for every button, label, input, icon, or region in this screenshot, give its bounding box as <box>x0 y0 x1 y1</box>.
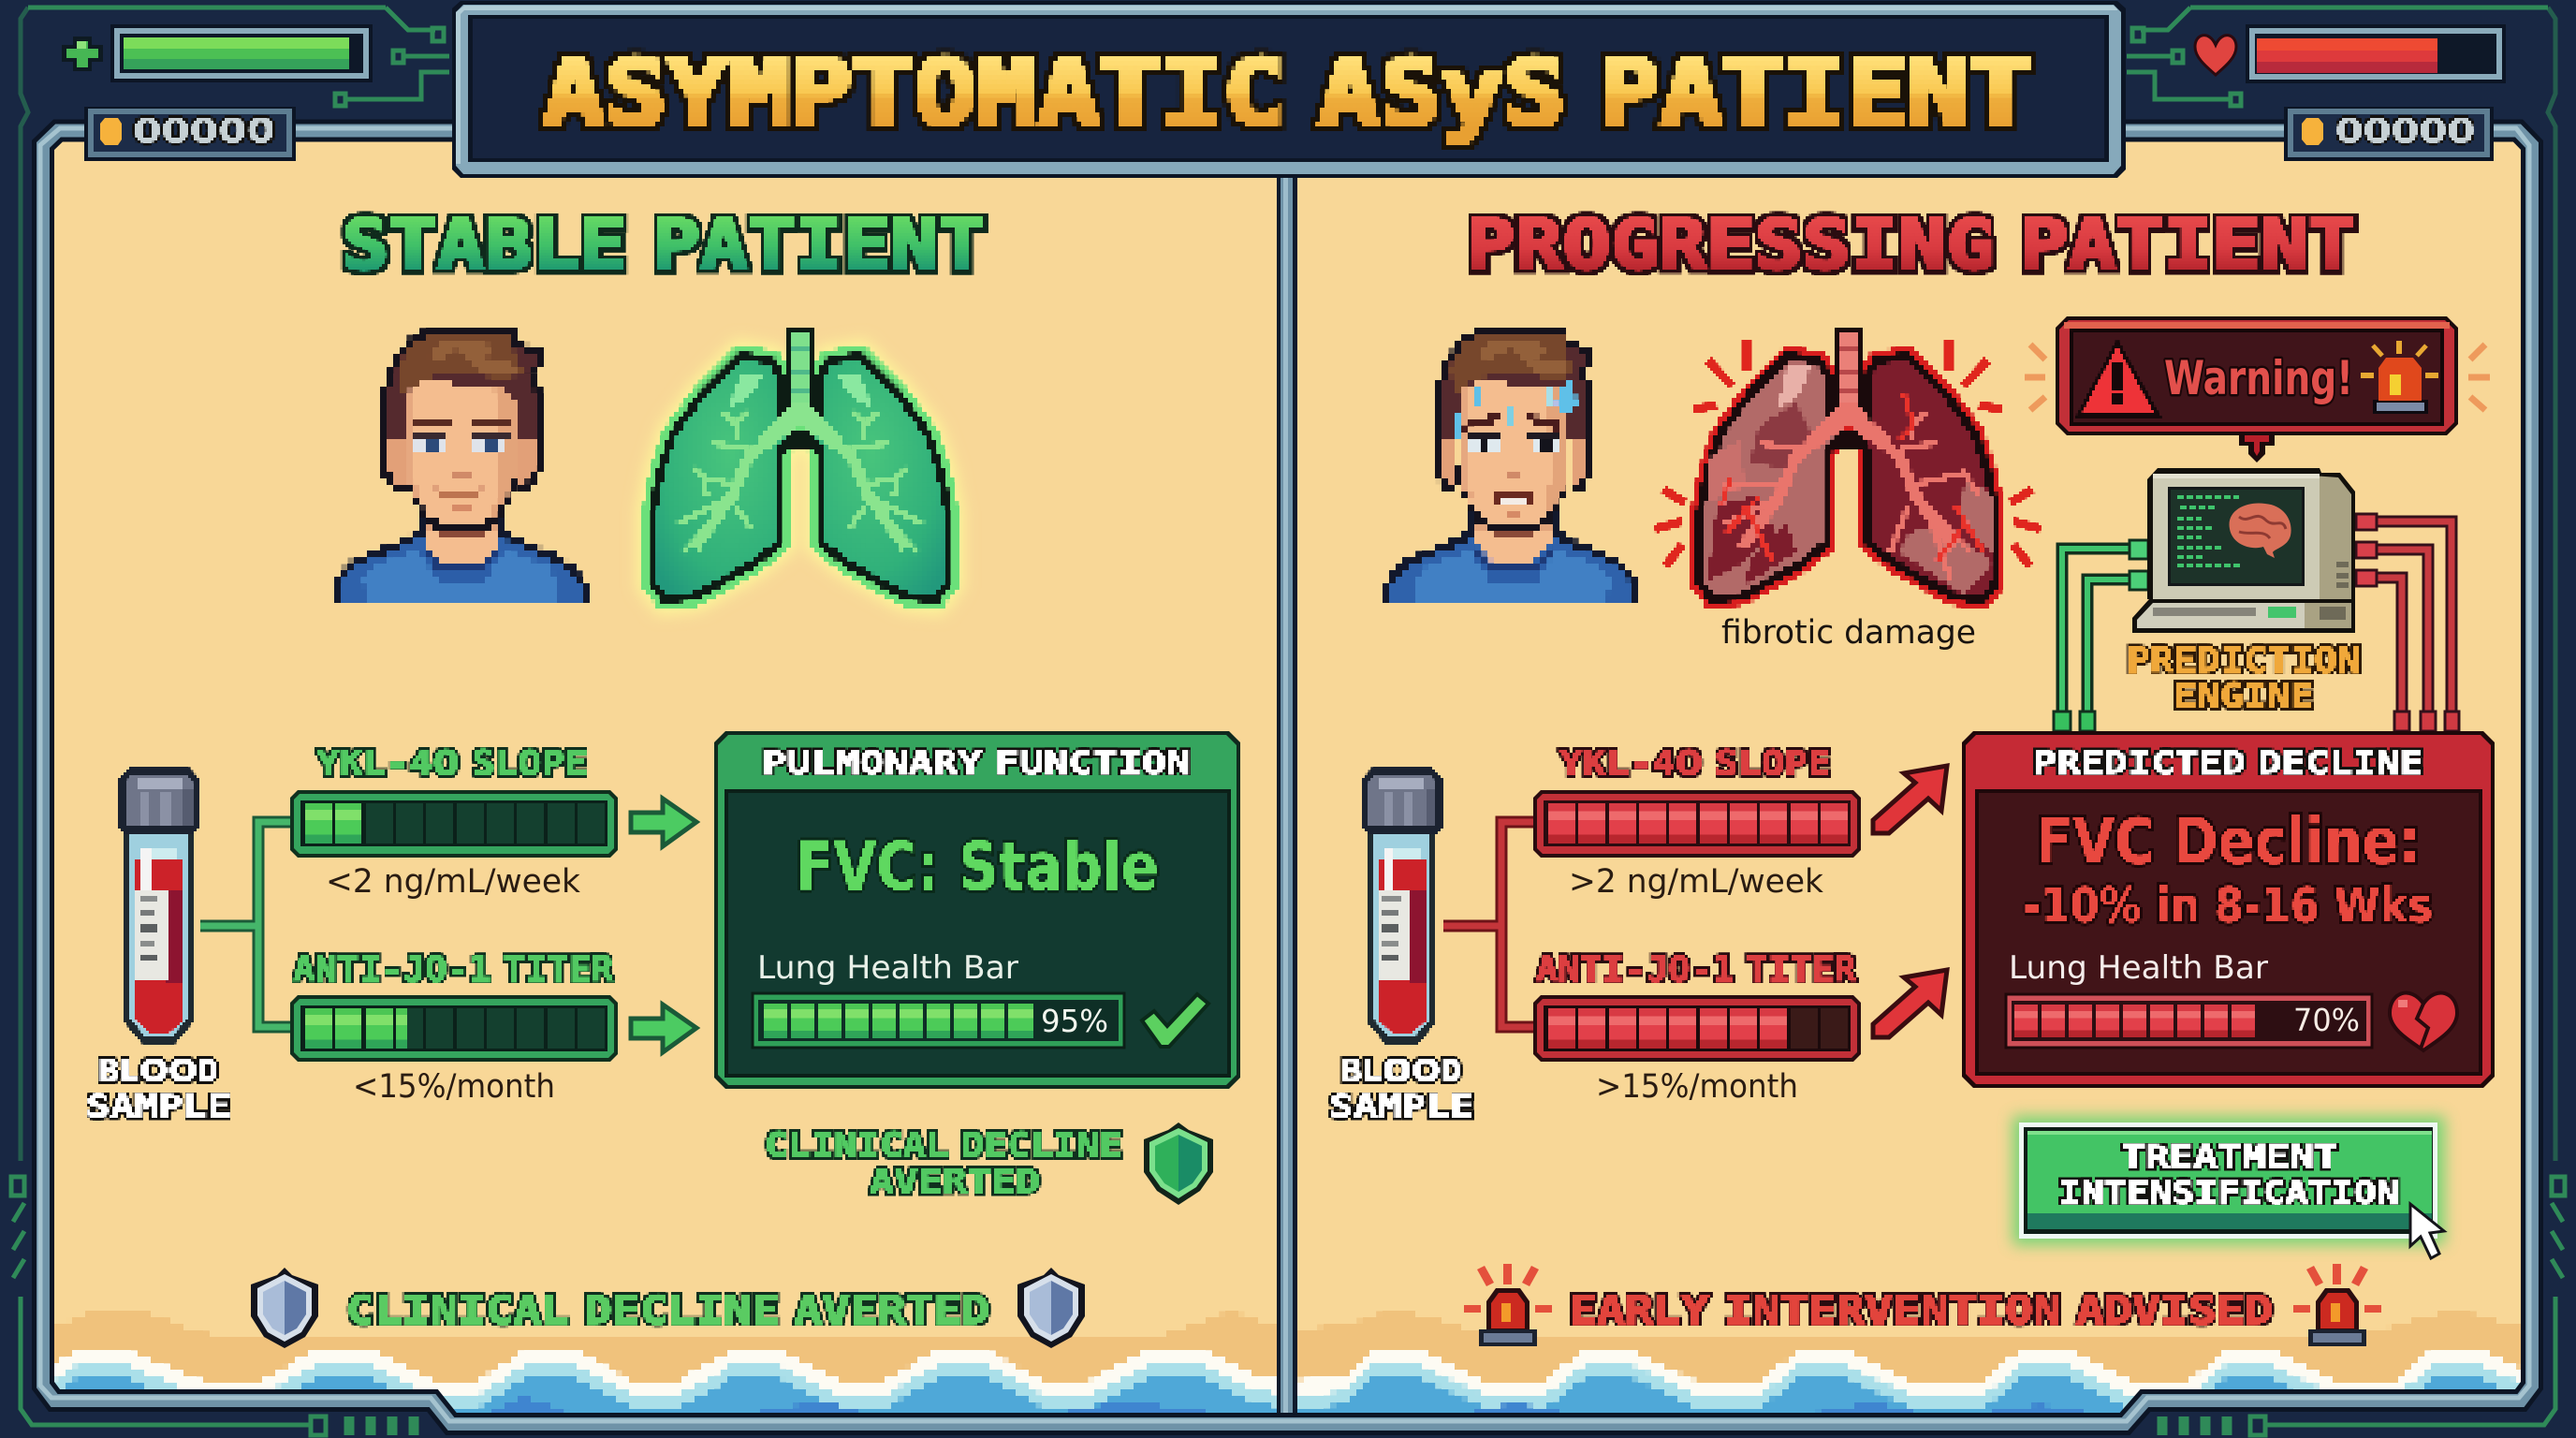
panel: predicted decline <box>1962 731 2495 1088</box>
stat: FVC stable: FVC: Stable <box>796 829 1159 905</box>
bar: YKL-40 right <box>1533 790 1861 858</box>
heading: stable patient: STABLE PATIENT <box>342 205 986 286</box>
icon: siren <box>2361 341 2438 414</box>
bar: lung health 70 <box>2006 994 2372 1048</box>
fibrotic lungs <box>1700 328 1996 599</box>
centre divider <box>1277 169 1297 1431</box>
bar: lung health 95 <box>753 993 1124 1048</box>
damage spikes <box>1655 339 2041 566</box>
value: anti-Jo-1 right: >15%/month <box>1596 1068 1798 1106</box>
sweat drops <box>1456 378 1578 436</box>
bar: YKL-40 left <box>290 790 618 858</box>
warning text: Warning! <box>2164 351 2353 405</box>
coin counter left <box>84 107 296 161</box>
bar: anti-Jo-1 left <box>290 995 618 1062</box>
cables <box>2062 521 2452 732</box>
arrow green bottom <box>631 1005 696 1052</box>
callout: clinical decline averted: AVERTED <box>870 1163 1040 1201</box>
icon: warning triangle <box>2075 339 2161 418</box>
label: anti-Jo-1 right: ANTI-JO-1 TITER <box>1536 949 1857 990</box>
panel: pulmonary function <box>714 731 1240 1089</box>
siren banner left <box>1464 1264 1552 1346</box>
callout: clinical decline averted: CLINICAL DECLINE <box>765 1125 1122 1166</box>
cable connectors <box>2054 514 2459 731</box>
coin counter right: 00000 <box>2335 112 2475 151</box>
bottom frame fill <box>0 1395 2576 1438</box>
progressing patient portrait <box>1385 328 1641 606</box>
keyboard <box>2132 599 2355 633</box>
label: blood sample right: BLOOD <box>1341 1052 1461 1089</box>
icon: heart <box>2195 36 2236 75</box>
prediction engine computer <box>2132 468 2355 633</box>
button: treatment intensification: TREATMENT <box>2121 1138 2338 1175</box>
button: treatment intensification: INTENSIFICATION <box>2058 1174 2399 1211</box>
siren banner right <box>2293 1264 2381 1346</box>
banner: early intervention advised: EARLY INTERVENTION ADVISED <box>1569 1287 2273 1333</box>
beach and waves <box>37 1309 2537 1438</box>
bar: lung health 95: 95% <box>1041 1003 1108 1039</box>
label: lung health bar: Lung Health Bar <box>757 949 1018 987</box>
value: YKL-40 right: >2 ng/mL/week <box>1569 863 1824 901</box>
connectors right <box>1443 822 1533 1027</box>
stat: FVC decline: FVC Decline: <box>2036 805 2421 879</box>
stable patient portrait <box>333 328 589 606</box>
label: blood sample left: SAMPLE <box>86 1088 231 1124</box>
stable health bar <box>110 24 373 82</box>
coin counter right <box>2284 107 2494 161</box>
circuit traces right <box>2127 7 2565 1435</box>
banner: clinical decline averted: CLINICAL DECLINE AVERTED <box>346 1287 989 1333</box>
circuit traces left <box>11 7 449 1435</box>
label: prediction engine: ENGINE <box>2174 676 2314 716</box>
shield banner left <box>251 1268 318 1348</box>
warning outer rays <box>2025 345 2490 410</box>
label: YKL-40 slope left: YKL-4 0 SLOPE <box>316 743 588 784</box>
label: prediction engine: PREDICTION <box>2127 640 2361 681</box>
label: anti-Jo-1 left: ANTI-JO-1 TITER <box>293 949 614 990</box>
stat: FVC decline <box>2024 805 2433 934</box>
bar: lung health 70: 70% <box>2293 1002 2360 1038</box>
heading: pulmonary function: PULMONARY FUNCTION <box>762 744 1191 781</box>
callout: clinical decline averted <box>765 1125 1122 1201</box>
icon: check mark <box>1142 994 1208 1047</box>
label: prediction engine <box>2127 640 2361 716</box>
heading: progressing patient: PROGRESSING PATIENT <box>1467 205 2356 286</box>
healthy lungs <box>652 328 948 599</box>
icon: plus health <box>62 37 103 71</box>
title: ASYMPTOMATIC ASyS PATIENT <box>543 40 2031 147</box>
label: blood sample right: SAMPLE <box>1329 1088 1474 1124</box>
icon: broken heart <box>2390 993 2457 1050</box>
progressing health bar <box>2246 24 2506 83</box>
blood sample tube right <box>1362 768 1442 1045</box>
icon: green shield <box>1144 1123 1213 1205</box>
arrow green top <box>631 799 696 846</box>
arrow red bottom <box>1873 970 1947 1037</box>
brain icon <box>2230 503 2291 558</box>
caption: fibrotic damage: fibrotic damage <box>1721 614 1976 652</box>
bar: anti-Jo-1 right <box>1533 995 1861 1062</box>
heading: predicted decline: PREDICTED DECLINE <box>2033 744 2423 781</box>
healthy lungs glow <box>652 356 948 599</box>
button: treatment intensification <box>2012 1116 2445 1245</box>
blood sample tube left <box>119 768 199 1045</box>
icon: cursor <box>2410 1204 2444 1258</box>
label: blood sample left: BLOOD <box>98 1052 218 1089</box>
value: anti-Jo-1 left: <15%/month <box>353 1068 555 1106</box>
connectors left <box>200 822 290 1027</box>
title banner panel <box>452 1 2126 178</box>
label: blood sample right <box>1329 1052 1474 1124</box>
label: YKL-40 slope right: YKL-4 0 SLOPE <box>1559 743 1831 784</box>
stat: FVC decline: -10% in 8-16 Wks <box>2024 878 2433 934</box>
value: YKL-40 left: <2 ng/mL/week <box>326 863 581 901</box>
label: blood sample left <box>86 1052 231 1124</box>
coin counter left: 00000 <box>133 112 275 151</box>
shield banner right <box>1017 1268 1085 1348</box>
warning callout <box>2056 316 2458 462</box>
screen readout lines <box>2177 497 2243 565</box>
arrow red top <box>1873 766 1947 833</box>
label: lung health bar: Lung Health Bar <box>2009 949 2268 987</box>
